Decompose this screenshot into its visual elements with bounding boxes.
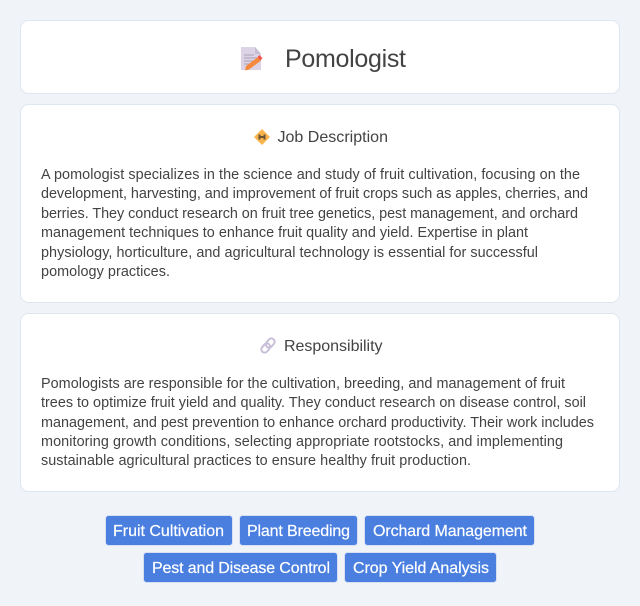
title text: Pomologist — [285, 45, 406, 73]
responsibility text: sustainable agricultural practices to ensure healthy fruit production. — [41, 453, 471, 469]
tag: fruit cultivation — [106, 516, 232, 546]
responsibility text: monitoring growth conditions, selecting appropriate rootstocks, and implementing — [41, 434, 563, 450]
responsibility text: management, and pest prevention to enhance orchard productivity. Their work includes — [41, 415, 594, 431]
panel: responsibility — [20, 314, 620, 492]
job description text: pomology practices. — [41, 264, 170, 280]
job description text: management techniques to enhance fruit quality and yield. Expertise in plant — [41, 225, 528, 241]
heading: job description: Job Description — [278, 129, 388, 146]
tag: orchard management: Orchard Management — [373, 523, 528, 540]
icon: document with pencil — [241, 47, 262, 70]
job description text: physiology, horticulture, and agricultural technology is essential for successful — [41, 245, 538, 261]
tag: plant breeding: Plant Breeding — [247, 523, 350, 540]
tag: crop yield analysis: Crop Yield Analysis — [353, 560, 489, 577]
icon: puzzle diamond — [254, 129, 270, 145]
tag: orchard management — [364, 516, 534, 546]
tag: fruit cultivation: Fruit Cultivation — [113, 523, 224, 540]
responsibility text — [41, 376, 594, 469]
job description text: berries. They conduct research on fruit tree genetics, pest management, and orchard — [41, 206, 578, 222]
tag: plant breeding — [240, 516, 358, 546]
tags — [106, 516, 534, 582]
tag: crop yield analysis — [344, 552, 496, 582]
job description text: A pomologist specializes in the science and study of fruit cultivation, focusing on the — [41, 167, 580, 183]
icon: chain link — [260, 337, 276, 354]
heading: responsibility: Responsibility — [284, 338, 382, 355]
panel: title — [20, 20, 620, 94]
tag: pest and disease control — [144, 552, 338, 582]
tag: pest and disease control: Pest and Disease Control — [152, 560, 330, 577]
job description text: development, harvesting, and improvement of fruit crops such as apples, cherries, and — [41, 186, 588, 202]
job description text — [41, 167, 588, 280]
panel: job description — [20, 104, 620, 302]
responsibility text: Pomologists are responsible for the cultivation, breeding, and management of fruit — [41, 376, 565, 392]
responsibility text: trees to optimize fruit yield and quality. They conduct research on disease control, soil — [41, 395, 586, 411]
